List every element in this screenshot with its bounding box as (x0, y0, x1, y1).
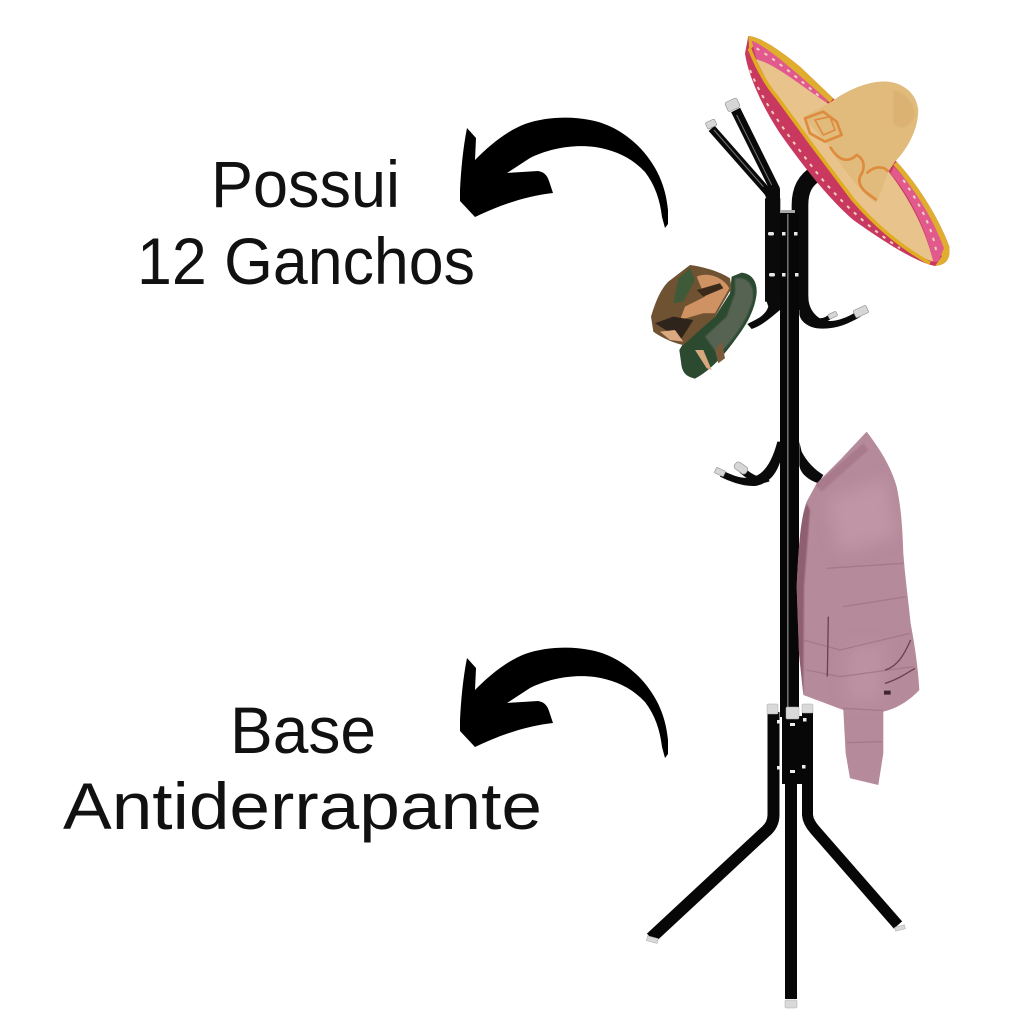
hook tips (705, 98, 869, 477)
sombrero crown (803, 81, 918, 203)
brim upper yellow rim (748, 36, 950, 266)
hook: upper right short (820, 315, 832, 321)
camo dark stripe (697, 283, 723, 297)
heading: Base Antiderrapante: Base (230, 693, 376, 767)
top collar edge (780, 210, 795, 213)
brim yellow front edge (749, 48, 930, 263)
brim tan inner (756, 59, 933, 262)
tube: left (765, 198, 780, 302)
camo hat crown (651, 265, 732, 345)
branch: front stick (712, 128, 773, 203)
brim shading (705, 278, 753, 355)
camo green patch (673, 268, 695, 303)
coat rack (646, 98, 905, 1008)
hook: upper right (799, 297, 861, 329)
stick highlight (714, 115, 772, 187)
sombrero brim silhouette (745, 36, 950, 266)
camouflage hat (651, 265, 757, 379)
pole highlight (787, 214, 789, 714)
rack: middle hooks (720, 442, 823, 486)
hook: upper left (747, 297, 780, 329)
jacket body (797, 432, 919, 785)
rack: base sleeve (782, 716, 802, 784)
sombrero hat (745, 36, 950, 266)
heading: Possui 12 Ganchos: Possui (211, 147, 400, 221)
hook: middle right (799, 442, 823, 483)
jacket ruffle and zip (827, 617, 915, 683)
rack: top branches and hooks (712, 110, 861, 329)
heading: Base Antiderrapante (63, 693, 542, 843)
camo dark patch (655, 317, 693, 338)
camo crown patches (680, 275, 729, 320)
tube: right (800, 173, 817, 310)
hook: middle left long (720, 442, 782, 486)
camo brown patch on brim (715, 342, 725, 363)
base caps (646, 704, 905, 1008)
rack: base tubes and legs (651, 712, 898, 999)
branch: back stick (736, 110, 775, 203)
jacket (796, 432, 919, 785)
arrow: bottom, pointing to heading (460, 648, 668, 758)
base bolts (777, 718, 806, 773)
rack: top collar bolts (768, 232, 798, 276)
camo light patch (660, 330, 683, 342)
crown highlight (893, 90, 915, 128)
hook: middle left short (742, 470, 768, 480)
arrow: top, pointing to heading (460, 118, 668, 228)
jacket shading (796, 443, 915, 743)
camo tan patch on brim (695, 350, 712, 370)
brim speckles (750, 48, 937, 253)
heading: Base Antiderrapante: Antiderrapante (63, 769, 542, 843)
jacket cuff tab (884, 691, 891, 695)
heading: Possui 12 Ganchos: 12 Ganchos (137, 224, 475, 298)
rack: centre pole (780, 212, 799, 717)
brim pink band (752, 41, 944, 262)
heading: Possui 12 Ganchos (137, 147, 475, 298)
sombrero orange embroidery (805, 112, 888, 200)
camo hat brim (679, 273, 757, 379)
